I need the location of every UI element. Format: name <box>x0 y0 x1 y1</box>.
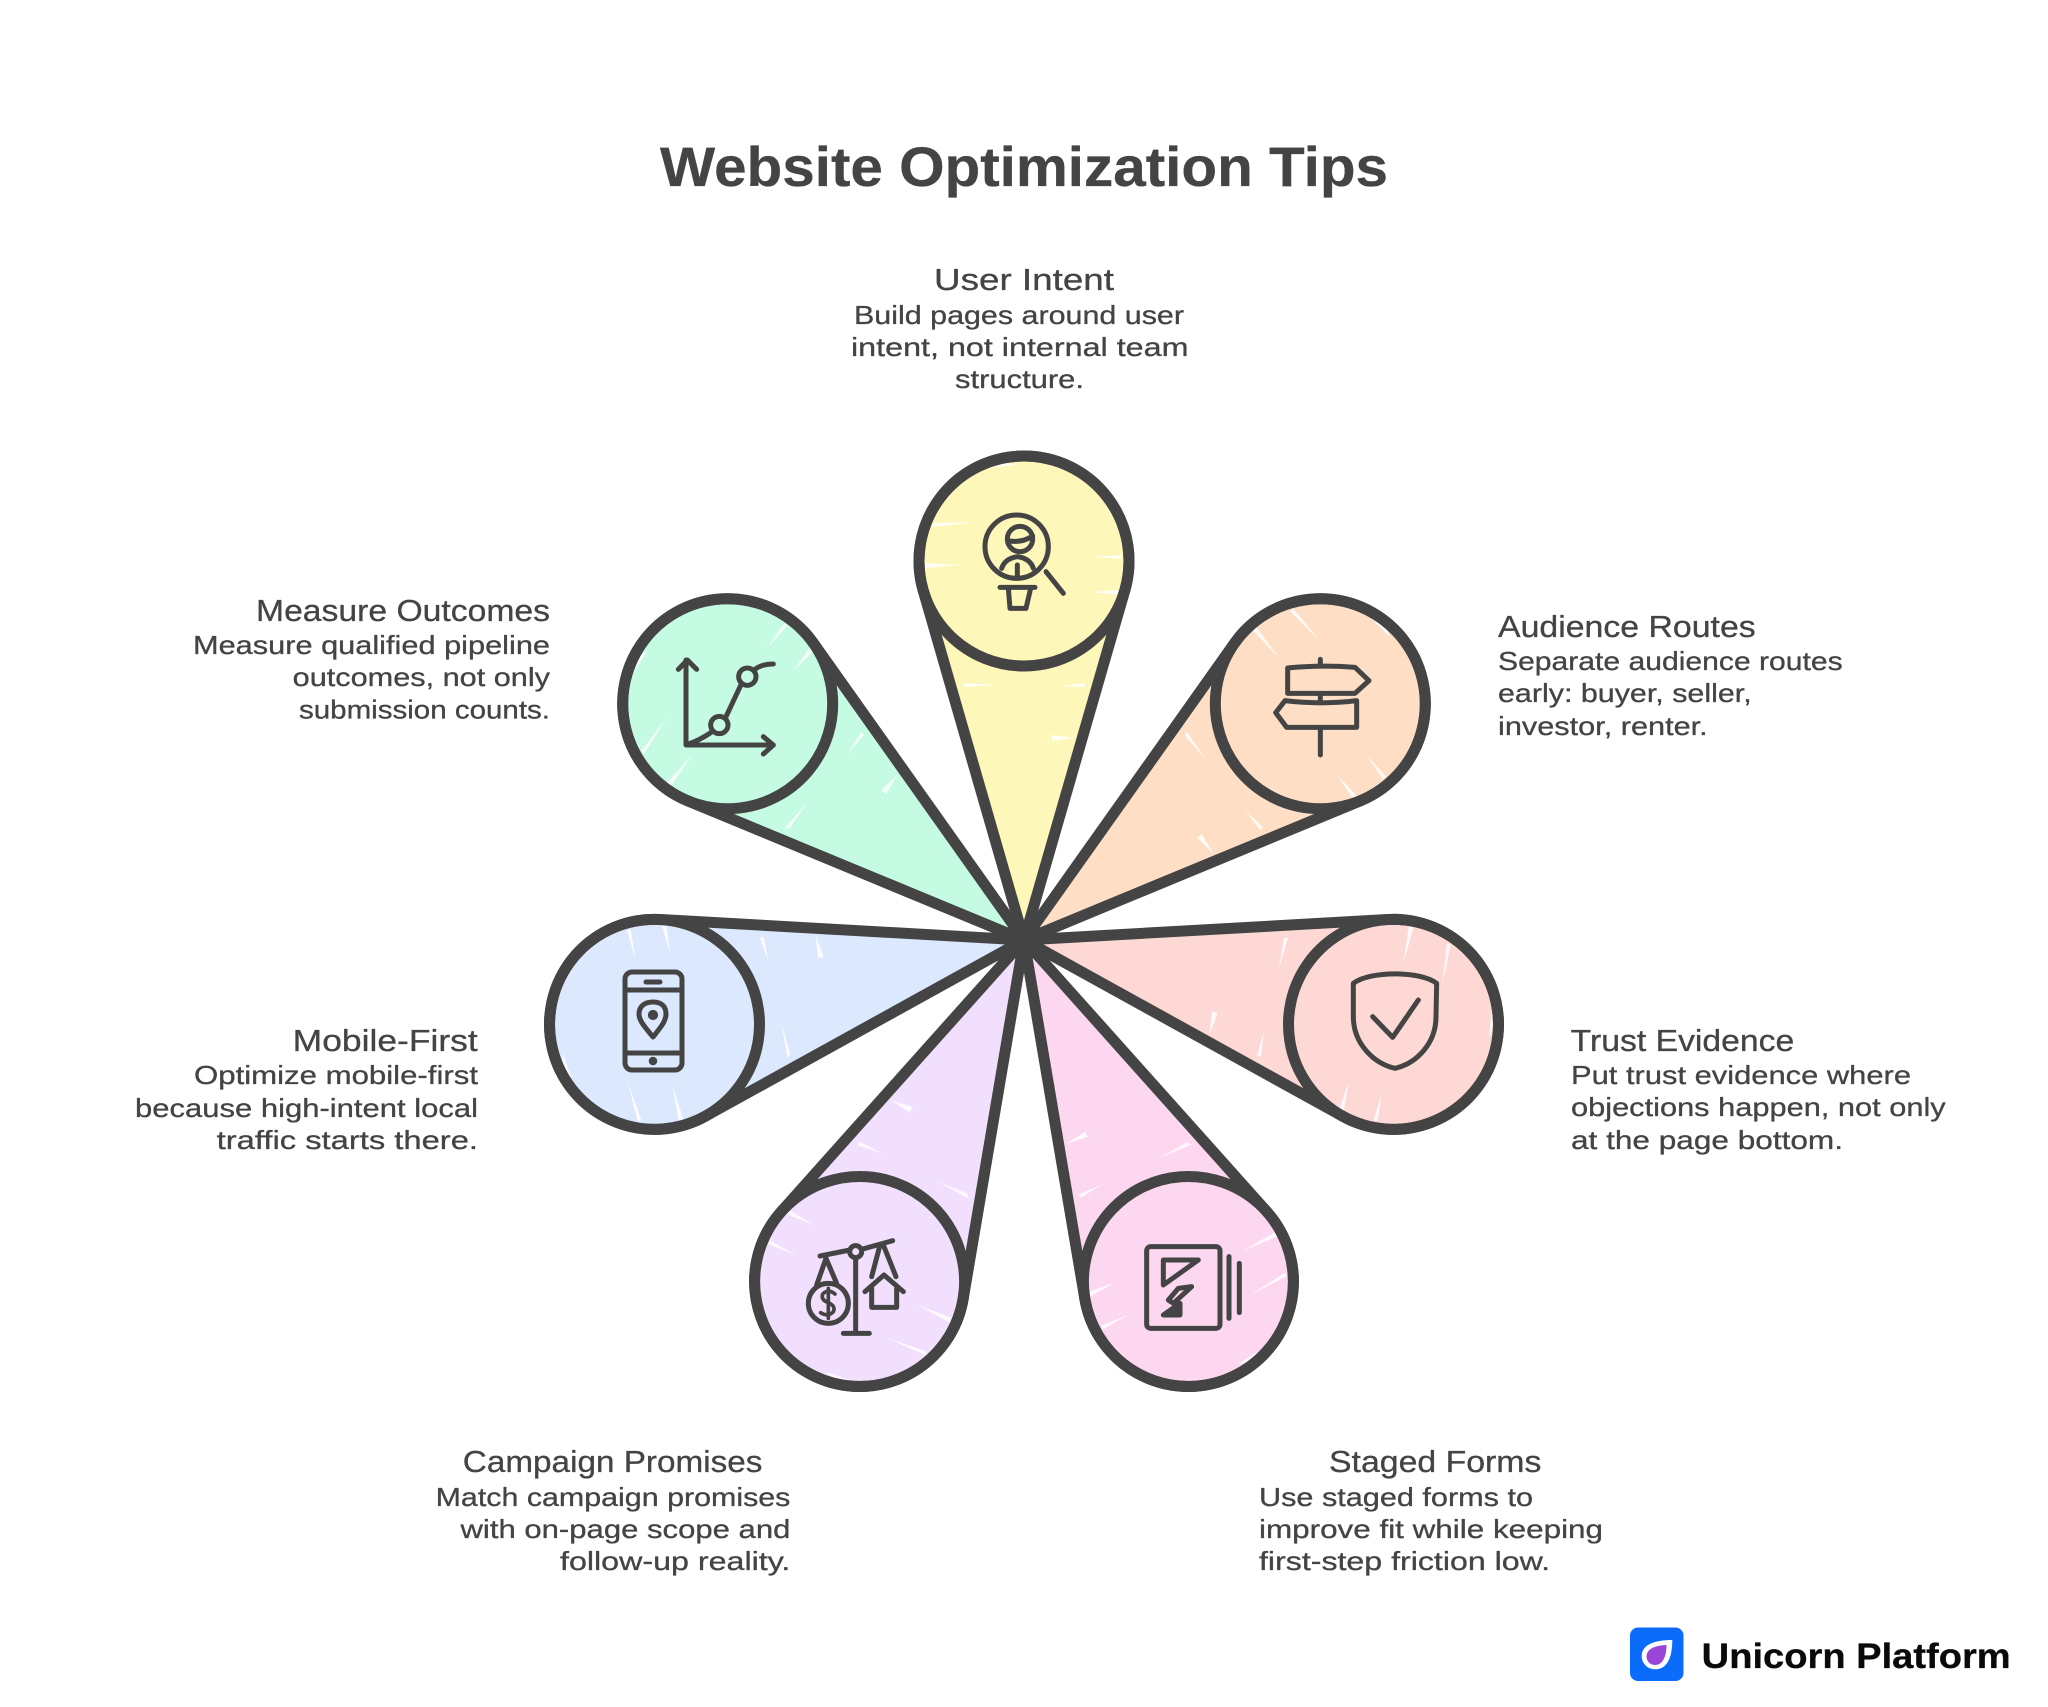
text block: audience routes <box>1498 609 1843 741</box>
body: user intent: structure. <box>955 364 1084 394</box>
title: Website Optimization Tips <box>660 135 1388 198</box>
body: staged forms <box>1259 1482 1603 1576</box>
petal: trust evidence <box>1001 838 1519 1150</box>
petal shape pink <box>929 894 1329 1422</box>
body: audience routes: investor, renter. <box>1498 711 1708 741</box>
icon: signpost <box>1276 659 1369 755</box>
body: measure outcomes: outcomes, not only <box>293 662 550 692</box>
heading: user intent: User Intent <box>934 262 1114 297</box>
heading: mobile-first: Mobile-First <box>293 1023 478 1058</box>
body: mobile-first: Optimize mobile-first <box>194 1060 479 1090</box>
body: mobile-first: traffic starts there. <box>217 1125 478 1155</box>
petal shape yellow <box>919 456 1129 940</box>
body: campaign promises <box>436 1482 790 1576</box>
body: audience routes <box>1498 646 1843 741</box>
petal: mobile-first <box>529 838 1047 1150</box>
body: staged forms: first-step friction low. <box>1259 1546 1550 1576</box>
icon: shield with check <box>1353 974 1437 1068</box>
petal: audience routes <box>959 556 1468 1022</box>
body: campaign promises: follow-up reality. <box>560 1546 790 1576</box>
icon: person in magnifier <box>985 515 1063 608</box>
heading: staged forms: Staged Forms <box>1329 1444 1541 1479</box>
petal: staged forms <box>929 894 1329 1422</box>
heading: trust evidence: Trust Evidence <box>1571 1023 1794 1058</box>
text block: mobile-first <box>135 1023 479 1155</box>
body: measure outcomes: Measure qualified pipeline <box>193 630 550 660</box>
petal: user intent <box>919 456 1129 940</box>
icon: balance scale with coin and house <box>808 1241 903 1333</box>
text block: user intent <box>851 262 1188 394</box>
heading: measure outcomes: Measure Outcomes <box>256 593 550 628</box>
body: mobile-first <box>135 1060 479 1155</box>
text block: measure outcomes <box>193 593 550 724</box>
text block: staged forms <box>1259 1444 1603 1576</box>
body: user intent: Build pages around user <box>854 300 1184 330</box>
icon: brand mark <box>1630 1628 1684 1681</box>
text block: trust evidence <box>1571 1023 1946 1155</box>
body: audience routes: Separate audience routes <box>1498 646 1843 676</box>
icon: phone with location pin <box>625 972 682 1070</box>
body: measure outcomes: submission counts. <box>299 694 550 724</box>
body: user intent <box>851 300 1188 394</box>
brand logo <box>1630 1628 2011 1681</box>
body: trust evidence <box>1571 1060 1946 1155</box>
body: trust evidence: objections happen, not only <box>1571 1092 1946 1122</box>
body: measure outcomes <box>193 630 550 724</box>
body: staged forms: Use staged forms to <box>1259 1482 1533 1512</box>
center hub <box>1010 925 1040 955</box>
body: campaign promises: with on-page scope and <box>459 1514 790 1544</box>
body: staged forms: improve fit while keeping <box>1259 1514 1603 1544</box>
body: trust evidence: Put trust evidence where <box>1571 1060 1911 1090</box>
brand name: Unicorn Platform <box>1702 1637 2011 1676</box>
petal shape purple <box>719 894 1119 1422</box>
heading: campaign promises: Campaign Promises <box>463 1444 762 1479</box>
petal shape mint <box>580 556 1089 1022</box>
body: mobile-first: because high-intent local <box>135 1093 478 1123</box>
text block: campaign promises <box>436 1444 790 1576</box>
petal shape blue <box>529 838 1047 1150</box>
body: trust evidence: at the page bottom. <box>1571 1125 1843 1155</box>
petal shape orange <box>959 556 1468 1022</box>
icon: line chart <box>678 660 773 754</box>
petal: campaign promises <box>719 894 1119 1422</box>
heading: audience routes: Audience Routes <box>1498 609 1756 644</box>
body: user intent: intent, not internal team <box>851 332 1188 362</box>
icon: staged form <box>1147 1247 1239 1328</box>
body: audience routes: early: buyer, seller, <box>1498 678 1752 708</box>
body: campaign promises: Match campaign promises <box>436 1482 790 1512</box>
petal: measure outcomes <box>580 556 1089 1022</box>
petal shape red <box>1001 838 1519 1150</box>
